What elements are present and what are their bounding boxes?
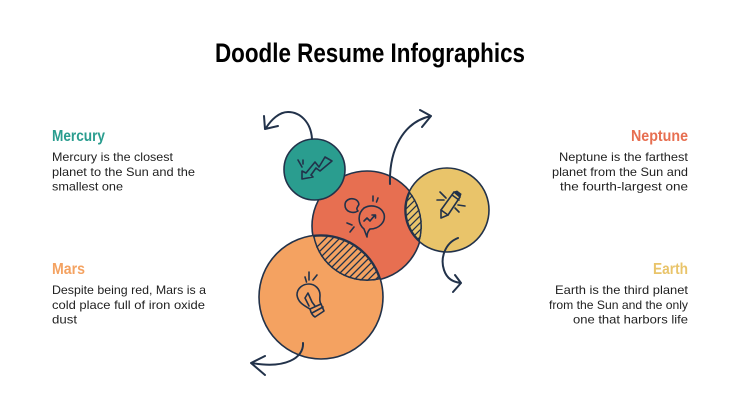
text block: Neptune: planet from the Sun and [552,165,688,179]
text block: Mercury: Mercury is the closest [52,150,174,164]
circle: yellow [405,168,489,252]
hatch overlap: red and orange [313,236,380,281]
hatch overlap: red and yellow [406,192,422,241]
icon: speech bubbles with chart [345,196,384,237]
title: Doodle Resume Infographics [215,38,525,68]
text block: Mars: dust [52,312,78,326]
text block: Earth [549,261,689,326]
text block: Neptune [552,128,689,194]
text block: Mercury: Mercury [52,128,105,145]
text block: Earth: one that harbors life [573,312,688,326]
text block: Mars: Despite being red, Mars is a [52,283,206,297]
arrow: from orange circle down-left [251,343,303,375]
icon: light bulb [297,272,324,317]
text block: Mercury: smallest one [52,180,123,194]
text block: Neptune: the fourth-largest one [560,180,688,194]
icon: lightning chart arrow [298,157,332,179]
text block: Mars: Mars [52,261,85,278]
icon: pencil [437,191,465,218]
text block: Mars: cold place full of iron oxide [52,298,205,312]
text block: Earth: Earth is the third planet [555,283,689,297]
arrow: from teal circle up-left [264,112,312,139]
text block: Earth: from the Sun and the only [549,298,688,312]
arrow: from yellow circle down-right [443,238,461,292]
text block: Neptune: Neptune is the farthest [559,150,689,164]
circle: orange [259,235,383,359]
text block: Mercury [52,128,195,194]
circle: red [312,171,422,281]
circle: teal [284,139,345,200]
text block: Neptune: Neptune [631,128,688,145]
text block: Mercury: planet to the Sun and the [52,165,195,179]
text block: Earth: Earth [653,261,688,278]
arrow: from red circle up-right [390,110,431,184]
text block: Mars [52,261,206,326]
